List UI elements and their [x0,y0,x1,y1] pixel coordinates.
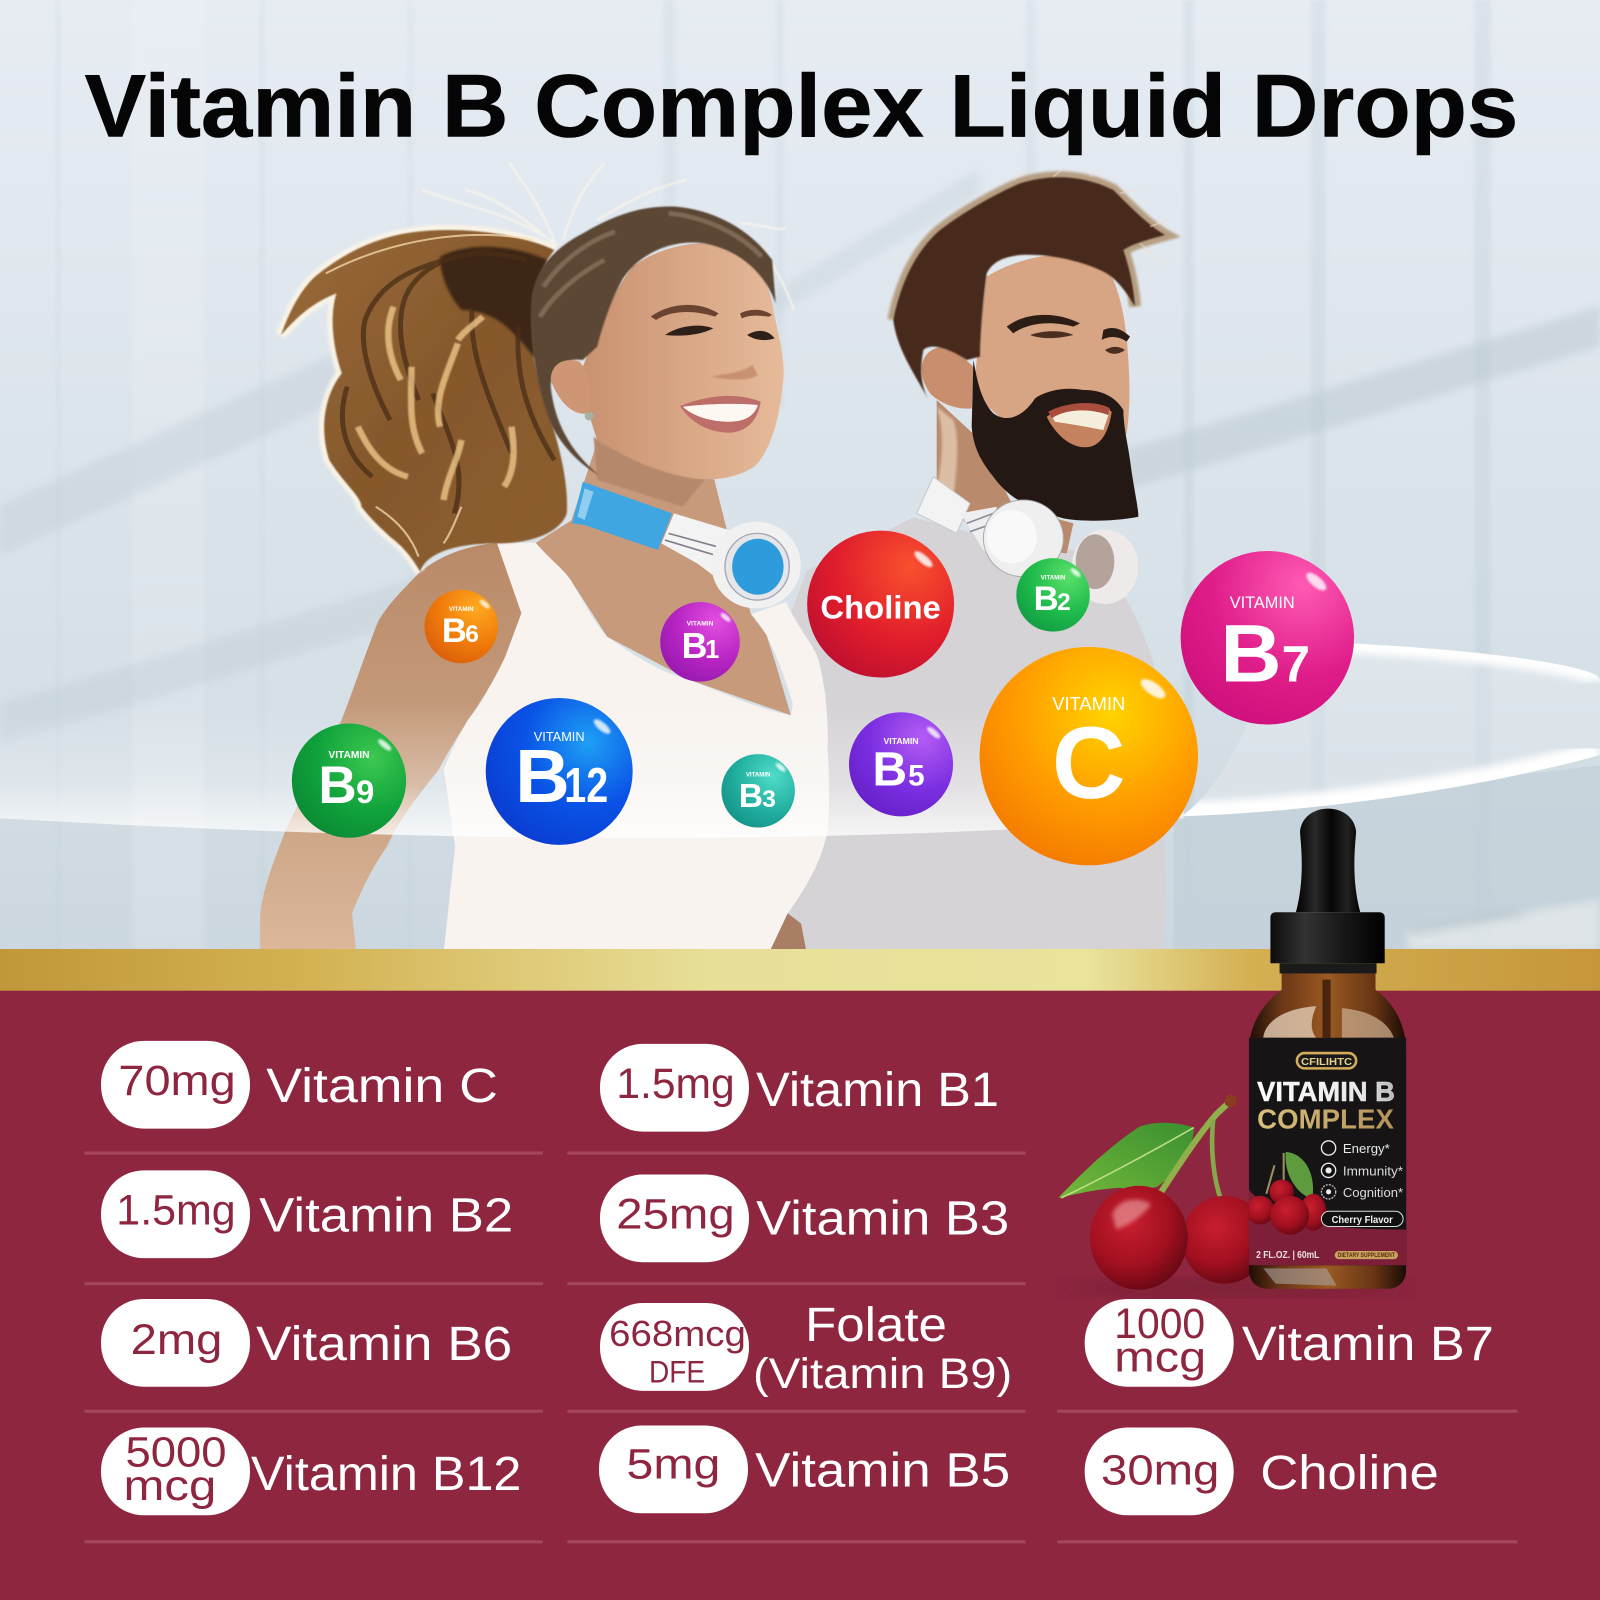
man ear [922,347,973,409]
bubble: vitamin B1: VITAMIN [687,621,714,628]
flavor pill: Cherry Flavor [1332,1215,1393,1226]
bubble: vitamin C: C [1052,706,1126,820]
dosage row: Vitamin B6: Vitamin B6 [256,1318,512,1371]
label heading: VITAMIN B [1257,1076,1395,1107]
bubble: vitamin B12: 12 [564,759,608,813]
bubble: vitamin B5: B [872,744,907,797]
bubble: vitamin B5: 5 [908,760,925,793]
dosage row: Folate: (Vitamin B9) [753,1350,1012,1398]
dosage row: Vitamin B5: Vitamin B5 [755,1445,1010,1498]
bubble: vitamin B7: 7 [1282,636,1310,693]
dosage row: Vitamin B3: 25mg [616,1191,735,1239]
woman tank top [444,543,829,950]
woman teeth [683,404,758,422]
dosage row: Vitamin B5: 5mg [627,1441,720,1489]
bubble: vitamin B6: B [442,612,467,650]
dosage row: Vitamin C [101,1041,498,1129]
bubble: vitamin B7: B [1220,609,1282,700]
bubble: choline: Choline [820,588,941,625]
woman ponytail halo strands [422,163,794,310]
photo: woman runner [260,163,829,950]
man mouth [1047,405,1112,447]
man t-shirt [788,517,1165,950]
bubble: vitamin B1: 1 [705,636,719,664]
dosage row: Vitamin B7: Vitamin B7 [1242,1318,1494,1371]
bubble: vitamin B9: 9 [356,773,374,810]
woman face [583,243,784,479]
bubble: vitamin B9: VITAMIN [328,750,370,761]
wine label band [1249,1190,1406,1265]
woman ponytail mass [281,230,567,572]
bubble: vitamin B2: B [1034,580,1059,618]
bubble: vitamin B12: VITAMIN [534,729,585,744]
bubble: vitamin B3 [721,754,795,828]
bubble: vitamin B6: VITAMIN [449,606,474,613]
cherries with leaf [1058,1095,1408,1297]
dosage row: Vitamin B12: mcg [123,1462,216,1510]
dosage row: Choline: 30mg [1101,1447,1219,1495]
man hair halo [893,177,1165,320]
gold band [0,949,1600,991]
woman headphones ring [725,533,789,600]
bubble: vitamin B5 [849,712,953,816]
woman ear [551,360,590,414]
woman blue earcup [732,539,784,595]
man neck [937,400,1073,553]
woman chest and neck [536,443,791,715]
dosage row: Vitamin B12: 5000 [126,1428,227,1476]
woman eyes [665,326,775,340]
glass highlights [1263,1006,1316,1038]
dosage row: Vitamin B3: Vitamin B3 [756,1193,1009,1246]
bubble: vitamin B2 [1016,558,1090,632]
leaf [1058,1123,1194,1198]
dropper cap [1270,912,1385,963]
dosage row: Vitamin B5 [599,1426,1010,1513]
dosage row: Vitamin B6: 2mg [131,1316,222,1364]
bubble: choline [807,531,954,678]
dosage row: Vitamin C: Vitamin C [266,1060,498,1113]
brand pill: CFILIHTC [1301,1057,1353,1068]
dosage row: Choline: Choline [1260,1447,1439,1500]
woman neck shadow [594,437,704,507]
background photo backdrop [0,0,1600,950]
stems [1153,1100,1232,1204]
product bottle [1246,809,1406,1289]
label benefits: Immunity* [1343,1164,1403,1179]
label heading [1257,1076,1395,1135]
bubble: vitamin C [980,647,1198,865]
bubble: vitamin B3: 3 [762,786,776,813]
bubble: vitamin B12 [486,698,633,845]
woman headphones white cushion [711,522,801,608]
man headphones band [917,477,970,533]
man face [973,255,1129,460]
woman arm [260,543,521,950]
dosage row: Vitamin B7: 1000 [1114,1300,1205,1348]
bubble: vitamin B7: VITAMIN [1230,594,1295,612]
burgundy panel [0,991,1600,1600]
black label [1249,1038,1406,1265]
bubble: vitamin B1 [660,602,740,682]
dosage row: Folate [600,1299,1012,1398]
bubble: vitamin B9 [292,723,406,838]
man brows and eyes [1007,315,1130,342]
dosage row: Vitamin B6 [101,1299,512,1387]
dosage row: Choline [1085,1428,1439,1515]
rear cherry [1182,1196,1267,1284]
man headphones left cup [983,500,1063,577]
woman brows [651,305,772,320]
front cherry [1090,1186,1188,1290]
dosage row: Vitamin C: 70mg [118,1057,236,1105]
bottle base highlight [1263,1268,1337,1286]
man headphones right cup [1072,529,1138,604]
man hair [893,177,1165,400]
dosage row: Vitamin B1 [600,1044,999,1132]
label benefits: Cognition* [1343,1185,1403,1200]
bubble: vitamin B6: 6 [465,621,479,648]
woman headphones band [661,513,747,593]
bubble: vitamin B3: B [739,778,763,815]
bubble: vitamin B3: VITAMIN [746,772,770,779]
woman earring [585,412,594,420]
bubble: vitamin B5: VITAMIN [884,736,918,746]
volume text: 2 FL.OZ. | 60mL [1256,1250,1319,1261]
dosage row: Vitamin B3 [600,1174,1009,1262]
dosage row: Vitamin B12: Vitamin B12 [251,1448,521,1501]
dosage row: Folate: 668mcg [609,1314,746,1354]
dosage row: Vitamin B1: Vitamin B1 [756,1064,999,1117]
bubble: vitamin B2: VITAMIN [1041,575,1065,582]
bubble: vitamin C: VITAMIN [1052,693,1125,714]
woman ponytail cream glow [281,230,554,572]
dosage row: Vitamin B2: 1.5mg [116,1186,236,1234]
dosage row: Vitamin B7 [1085,1299,1494,1387]
dosage row: Folate: DFE [649,1354,705,1390]
label cherries [1246,1152,1327,1235]
dosage row: Folate: Folate [805,1299,947,1352]
label heading: COMPLEX [1257,1104,1395,1135]
dosage row: Vitamin B2: Vitamin B2 [259,1190,513,1243]
bubble: vitamin B6 [424,590,498,663]
bubble: vitamin B1: B [682,626,707,666]
title: Vitamin B Complex Liquid Drops [85,57,1518,156]
woman ponytail dark knot [440,247,547,360]
brand pill [1297,1053,1356,1068]
woman nose shadow [711,365,758,380]
bubble: vitamin B7 [1181,551,1354,724]
label benefits [1321,1141,1403,1200]
dosage row: Vitamin B1: 1.5mg [616,1060,735,1108]
woman hair top [531,207,776,475]
woman blue collar [572,482,672,550]
label benefits: Energy* [1343,1141,1390,1156]
translucent swoosh ribbon [0,641,1600,838]
dosage row: Vitamin B7: mcg [1114,1333,1206,1381]
flavor pill [1321,1211,1403,1227]
bubble: vitamin B12: B [515,735,570,819]
dosage row: Vitamin B2 [101,1170,513,1258]
photo: man runner [788,168,1167,950]
supplement tag: DIETARY SUPPLEMENT [1338,1252,1395,1259]
neck and shoulders glass [1249,973,1406,1289]
woman lips [680,396,761,433]
bubble: vitamin B9: B [318,756,357,815]
dropper bulb [1296,809,1360,912]
dosage row: Vitamin B12 [101,1428,521,1515]
bubble: vitamin B2: 2 [1057,589,1071,616]
man beard [972,360,1138,521]
woman bottom-right skin gap [770,913,806,950]
